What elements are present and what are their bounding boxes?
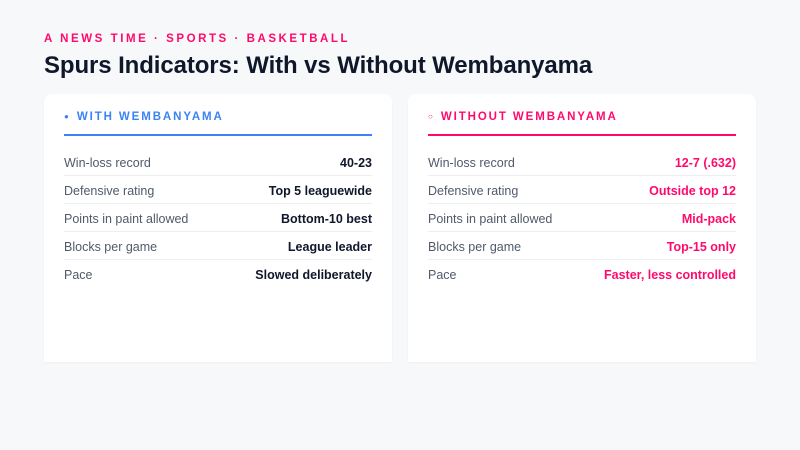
rows: with: Points in paint allowed	[64, 212, 188, 226]
rows: with	[64, 156, 372, 282]
panel: without wembanyama	[408, 94, 756, 362]
heading: without: ○ WITHOUT WEMBANYAMA	[428, 111, 618, 123]
rows: with: Bottom-10 best	[281, 212, 372, 226]
rows: with: Slowed deliberately	[255, 268, 372, 282]
rows: without: Outside top 12	[649, 184, 736, 198]
rows: without: Defensive rating	[428, 184, 518, 198]
heading: with: ● WITH WEMBANYAMA	[64, 111, 224, 123]
rows: without: Win-loss record	[428, 156, 515, 170]
rows: with: Win-loss record	[64, 156, 151, 170]
panel: with wembanyama	[44, 94, 392, 362]
rows: without: Faster, less controlled	[604, 268, 736, 282]
rows: with: Pace	[64, 268, 92, 282]
rows: without: Top-15 only	[667, 240, 736, 254]
rows: without: Pace	[428, 268, 456, 282]
title: Spurs Indicators: With vs Without Wembanyama	[44, 52, 592, 79]
rows: without: Blocks per game	[428, 240, 521, 254]
rows: with: League leader	[288, 240, 372, 254]
rows: without: 12-7 (.632)	[675, 156, 736, 170]
rows: without: Mid-pack	[682, 212, 736, 226]
rows: with: 40-23	[340, 156, 372, 170]
rows: without: Points in paint allowed	[428, 212, 552, 226]
rows: with: Defensive rating	[64, 184, 154, 198]
kicker: A NEWS TIME · SPORTS · BASKETBALL	[44, 33, 350, 45]
rows: with: Blocks per game	[64, 240, 157, 254]
rows: with: Top 5 leaguewide	[269, 184, 372, 198]
rows: without	[428, 156, 736, 282]
